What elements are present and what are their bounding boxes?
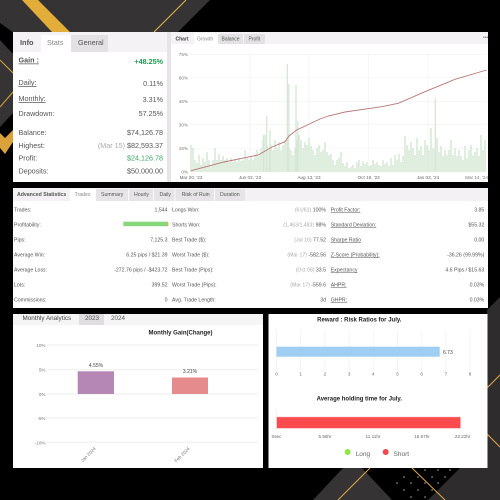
reward risk bar chart: 8 xyxy=(469,372,472,376)
x axis labels: Aug 13, '23 xyxy=(297,175,321,180)
reward risk bar chart: 1 xyxy=(299,372,302,376)
bar: Feb 2024: 3.21% xyxy=(183,369,198,375)
reward risk bar chart: 4 xyxy=(372,372,375,376)
reward risk bar chart: 0 xyxy=(275,372,278,376)
column 3 statistics: Sharpe Ratio xyxy=(331,238,361,244)
balance stats: Deposits: xyxy=(18,166,48,176)
monthly tabs xyxy=(22,315,126,322)
statistics tabs: Advanced Statistics xyxy=(17,192,66,198)
holding time title: Average holding time for July. xyxy=(317,396,402,402)
column 2 statistics: (Mar 17) -582.56 xyxy=(287,252,326,258)
monthly gain chart: 5% xyxy=(39,368,46,372)
column 2 statistics: Worst Trade (Pips): xyxy=(172,282,217,288)
column 2 statistics: (Mar 17) -559.6 xyxy=(290,282,326,288)
monthly gain chart: 10% xyxy=(36,343,46,348)
panel: monthly analytics xyxy=(13,314,263,468)
column 2 statistics: (1,463/1,483) 98% xyxy=(283,222,326,228)
reward risk title: Reward : Risk Ratios for July. xyxy=(317,318,402,324)
column 1 statistics: 399.52 xyxy=(152,282,168,288)
column 3 statistics: Z-Score (Probability): xyxy=(331,252,380,258)
reward risk bar chart: 7 xyxy=(445,372,448,376)
y axis labels: 15% xyxy=(179,146,188,151)
chart tabs: Balance xyxy=(222,36,240,42)
y axis labels xyxy=(179,52,188,174)
return stats: 3.31% xyxy=(143,95,164,104)
balance stats: $74,126.78 xyxy=(127,128,163,137)
column 1 statistics: Trades: xyxy=(14,208,31,214)
reward risk bar chart: 5 xyxy=(396,372,399,376)
statistics tabs: Hourly xyxy=(134,192,149,198)
tabs: Stats xyxy=(47,38,64,47)
return stats: Daily: xyxy=(18,78,36,87)
column 3 statistics: Standard Deviation: xyxy=(331,222,376,228)
reward risk bar chart: 6.73 xyxy=(443,350,453,356)
balance stats: Highest: xyxy=(18,141,45,150)
column 3 statistics: -36.26 (99.99%) xyxy=(447,252,485,258)
monthly chart title: Monthly Gain(Change) xyxy=(148,330,212,336)
column 3 statistics: Expectancy xyxy=(331,268,358,274)
holding time bar chart: 5.56hr xyxy=(318,434,332,439)
panel: account info xyxy=(13,32,168,182)
balance stats: Balance: xyxy=(18,128,46,137)
column 2 statistics: (Oct 08) 33.5 xyxy=(296,268,326,274)
monthly gain chart: -10% xyxy=(35,440,46,446)
statistics tabs: Trades xyxy=(74,192,91,198)
y axis labels: 75% xyxy=(179,52,188,57)
return stats: 57.25% xyxy=(139,109,164,118)
chart tabs: Chart xyxy=(176,36,189,42)
legend: Long xyxy=(356,451,371,458)
column 3 statistics: 0.00 xyxy=(474,238,484,244)
column 3 statistics: Profit Factor: xyxy=(331,208,360,214)
column 1 statistics: Profitability: xyxy=(14,222,41,228)
x axis labels: Jun 02, '23 xyxy=(239,175,262,180)
column 1 statistics: Lots: xyxy=(14,282,25,288)
column 1 statistics: Pips: xyxy=(14,238,26,244)
panel: growth chart xyxy=(167,32,489,182)
reward risk bar chart: 6 xyxy=(420,372,423,376)
statistics tabs: Summary xyxy=(101,192,124,198)
statistics tabs: Daily xyxy=(160,192,171,198)
column 1 statistics: Average Loss: xyxy=(14,268,47,274)
column 2 statistics: Avg. Trade Length: xyxy=(172,298,216,304)
x axis labels xyxy=(180,175,488,180)
column 1 statistics xyxy=(14,208,168,304)
column 1 statistics: 6.25 pips / $21.39 xyxy=(126,252,168,258)
statistics tabs: Duration xyxy=(220,192,240,198)
chart tabs: Growth xyxy=(197,36,213,42)
tabs: General xyxy=(78,38,104,47)
panel: reward risk and holding time xyxy=(268,314,488,468)
growth chart plot xyxy=(179,52,488,180)
reward risk bar chart xyxy=(275,330,472,376)
column 1 statistics: 1,544 xyxy=(155,208,168,214)
return stats: 0.11% xyxy=(143,79,164,88)
return stats xyxy=(18,78,164,118)
column 1 statistics: -272.76 pips / -$423.72 xyxy=(114,268,168,274)
y axis labels: 0% xyxy=(181,170,188,174)
balance stats: $50,000.00 xyxy=(127,166,163,176)
bar: Jan 2024: 4.55% xyxy=(89,363,104,369)
column 3 statistics xyxy=(331,208,485,304)
holding time bar chart: 16.67hr xyxy=(414,434,430,439)
legend xyxy=(345,449,409,458)
monthly gain chart: Jan 2024 xyxy=(80,446,97,463)
column 2 statistics: Worst Trade ($): xyxy=(172,252,209,258)
statistics tabs xyxy=(17,192,240,198)
legend: Short xyxy=(394,451,409,458)
x axis labels: Jan 03, '24 xyxy=(417,175,440,180)
monthly gain chart: Feb 2024 xyxy=(173,446,191,463)
column 1 statistics: Average Win: xyxy=(14,252,45,258)
column 3 statistics: 0.03% xyxy=(470,282,485,288)
gain row: Gain : xyxy=(18,56,39,64)
monthly tabs: 2024 xyxy=(111,315,126,322)
column 1 statistics: 7,125.3 xyxy=(150,238,168,244)
column 2 statistics: Best Trade (Pips): xyxy=(172,268,214,274)
chart tabs: Profit xyxy=(248,36,261,42)
column 3 statistics: GHPR: xyxy=(331,298,347,304)
balance stats: (Mar 15) $82,593.37 xyxy=(98,141,163,150)
column 3 statistics: $55.32 xyxy=(468,222,484,228)
column 3 statistics: 0.03% xyxy=(470,298,485,304)
column 2 statistics: Longs Won: xyxy=(172,208,200,214)
monthly gain chart xyxy=(35,343,258,463)
monthly tabs: 2023 xyxy=(85,315,100,322)
x axis labels: Oct 19, '23 xyxy=(358,175,380,180)
column 2 statistics: Shorts Won: xyxy=(172,222,200,228)
return stats: Drawdown: xyxy=(18,109,54,118)
column 3 statistics: AHPR: xyxy=(331,282,347,288)
bar: Jan 2024 xyxy=(78,363,114,394)
reward risk bar chart: 3 xyxy=(348,372,351,376)
return stats: Monthly: xyxy=(18,94,46,103)
x axis labels: Mar 14, '24 xyxy=(465,175,488,180)
holding time bar chart: 22.22hr xyxy=(455,434,471,439)
profitability bar xyxy=(123,222,168,226)
panel: advanced statistics xyxy=(13,188,488,308)
column 2 statistics: (61/61) 100% xyxy=(295,208,326,214)
column 2 statistics xyxy=(172,208,326,304)
reward risk bar chart: 2 xyxy=(324,372,327,376)
chart tabs: ••• xyxy=(483,35,489,41)
column 2 statistics: Best Trade ($): xyxy=(172,238,206,244)
column 1 statistics: 0 xyxy=(165,298,168,304)
tabs: Info xyxy=(20,38,34,47)
column 2 statistics: (Jul 16) 77.52 xyxy=(294,238,326,244)
y axis labels: 45% xyxy=(179,99,188,104)
gain row: +48.25% xyxy=(134,57,164,66)
column 3 statistics: 3.85 xyxy=(474,208,484,214)
column 1 statistics: Commissions: xyxy=(14,298,47,304)
statistics tabs: Risk of Ruin xyxy=(182,192,210,198)
monthly tabs: Monthly Analytics xyxy=(22,315,71,322)
x axis labels: Mar 20, '23 xyxy=(180,175,203,180)
balance stats: Profit: xyxy=(18,154,37,162)
balance stats: $24,126.78 xyxy=(127,154,163,162)
chart tabs xyxy=(176,35,489,42)
balance stats xyxy=(18,128,163,176)
monthly gain chart: -5% xyxy=(37,416,46,421)
y axis labels: 60% xyxy=(179,76,188,80)
holding time bar chart: 0sec xyxy=(272,434,282,439)
holding time bar chart xyxy=(272,410,471,439)
monthly gain chart: 0% xyxy=(39,392,46,397)
y axis labels: 30% xyxy=(179,122,188,128)
gain row xyxy=(18,56,164,66)
column 2 statistics: 3d xyxy=(320,298,326,304)
tabs xyxy=(20,38,104,47)
column 3 statistics: 4.6 Pips / $15.63 xyxy=(445,268,484,274)
bar: Feb 2024 xyxy=(172,369,208,394)
holding time bar chart: 11.11hr xyxy=(366,434,381,439)
